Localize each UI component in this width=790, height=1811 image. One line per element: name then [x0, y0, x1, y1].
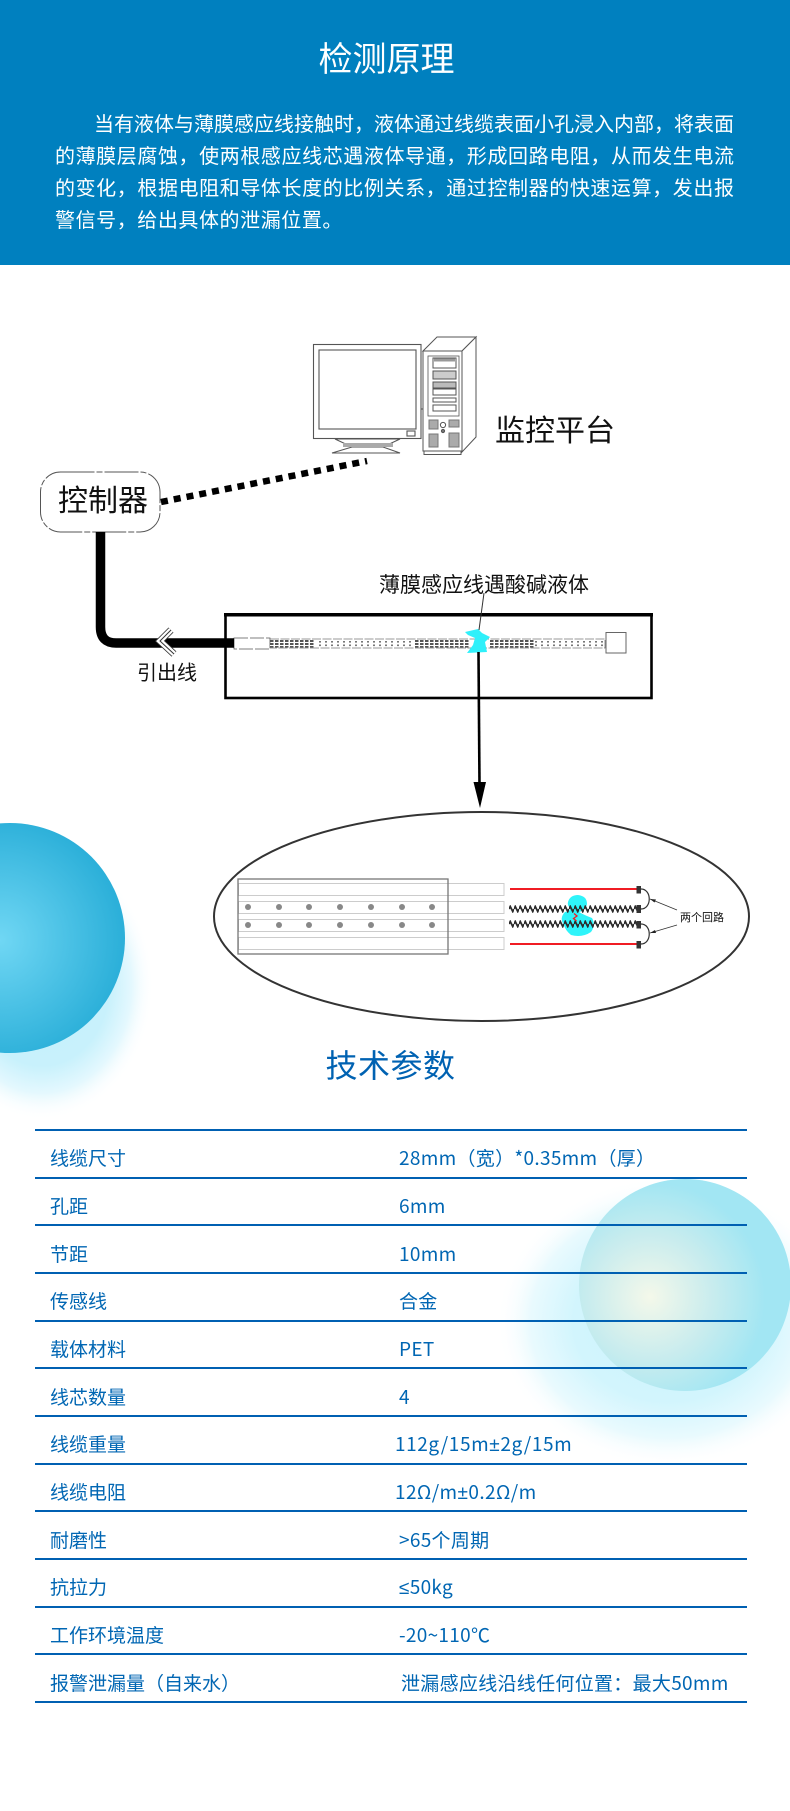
row: cable resistance: 12Ω/m±0.2Ω/m — [395, 1478, 537, 1505]
row: hole spacing — [50, 1192, 446, 1219]
row: core count: 4 — [399, 1383, 410, 1410]
description paragraph: 当有液体与薄膜感应线接触时，液体通过线缆表面小孔浸入内部，将表面 — [94, 108, 734, 137]
row: pitch: 节距 — [50, 1240, 88, 1267]
row: operating temperature: -20~110℃ — [399, 1621, 490, 1648]
description paragraph: 的薄膜层腐蚀，使两根感应线芯遇液体导通，形成回路电阻，从而发生电流 — [55, 140, 734, 169]
row: operating temperature — [50, 1621, 490, 1648]
lead cable — [100, 532, 234, 643]
row: sensing wire: 传感线 — [50, 1287, 107, 1314]
row: pitch — [50, 1240, 456, 1267]
row: sensing wire: 合金 — [399, 1287, 438, 1314]
controller box — [40, 472, 160, 532]
monitor — [314, 344, 423, 453]
row: cable resistance: 线缆电阻 — [50, 1478, 126, 1505]
row: abrasion resistance — [50, 1526, 489, 1553]
row: hole spacing: 6mm — [399, 1192, 446, 1219]
row: alarm leak amount — [50, 1669, 729, 1696]
row: pitch: 10mm — [399, 1240, 456, 1267]
row: alarm leak amount: 报警泄漏量（自来水） — [50, 1669, 240, 1696]
row: abrasion resistance: 耐磨性 — [50, 1526, 107, 1553]
row: abrasion resistance: >65个周期 — [399, 1526, 489, 1553]
row: sensing wire — [50, 1287, 438, 1314]
row: carrier material: PET — [399, 1335, 434, 1362]
row: carrier material: 载体材料 — [50, 1335, 126, 1362]
two loops callout — [650, 899, 724, 933]
row: carrier material — [50, 1335, 434, 1362]
description paragraph: 的变化，根据电阻和导体长度的比例关系，通过控制器的快速运算，发出报 — [55, 172, 734, 201]
row: core count — [50, 1383, 410, 1410]
two loops callout: 两个回路 — [680, 909, 724, 925]
row: tensile strength: 抗拉力 — [50, 1573, 107, 1600]
left blue circle — [0, 823, 154, 1120]
label: monitoring platform: 监控平台 — [495, 406, 615, 450]
pointer line — [479, 593, 484, 630]
sensor panel — [224, 613, 653, 698]
dashed link — [161, 461, 367, 502]
row: cable size: 线缆尺寸 — [50, 1144, 126, 1171]
description paragraph — [55, 108, 734, 233]
row: cable weight — [50, 1430, 572, 1457]
row: hole spacing: 孔距 — [50, 1192, 88, 1219]
row: core count: 线芯数量 — [50, 1383, 126, 1410]
header title: 检测原理 — [318, 32, 454, 81]
circuits — [509, 886, 649, 948]
row: tensile strength: ≤50kg — [399, 1573, 453, 1600]
label: film sensor wire meets acid/alkali liquid: 薄膜感应线遇酸碱液体 — [379, 569, 589, 599]
icon: computer — [314, 337, 476, 454]
right pale circle — [496, 1177, 790, 1467]
row: alarm leak amount: 泄漏感应线沿线任何位置：最大50mm — [401, 1669, 729, 1696]
label: lead wire: 引出线 — [137, 656, 197, 686]
row: cable size: 28mm（宽）*0.35mm（厚） — [399, 1144, 655, 1171]
arrow — [474, 652, 486, 808]
controller box: 控制器 — [58, 476, 148, 520]
row: cable weight: 线缆重量 — [50, 1430, 126, 1457]
description paragraph: 警信号，给出具体的泄漏位置。 — [55, 204, 343, 233]
row: cable resistance — [50, 1478, 537, 1505]
tower — [423, 337, 476, 454]
row: operating temperature: 工作环境温度 — [50, 1621, 164, 1648]
liquid leak spot — [465, 629, 490, 653]
section title: technical parameters: 技术参数 — [325, 1041, 456, 1087]
cable cross-section — [238, 879, 504, 954]
row: cable weight: 112g/15m±2g/15m — [395, 1430, 572, 1457]
row: tensile strength — [50, 1573, 453, 1600]
cable break symbol — [160, 630, 174, 654]
leak blob — [562, 895, 594, 936]
header panel — [0, 0, 790, 265]
row: cable size — [50, 1144, 655, 1171]
magnified ellipse — [214, 812, 749, 1021]
